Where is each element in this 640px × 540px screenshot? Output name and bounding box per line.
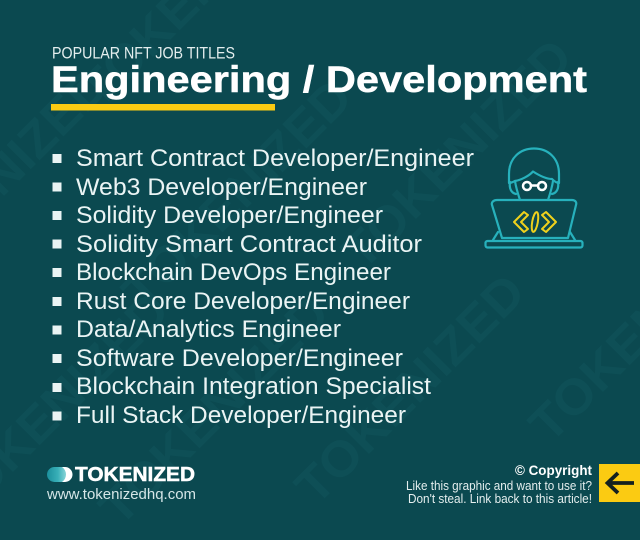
job titles list: Blockchain Integration Specialist <box>76 373 431 400</box>
laptop base <box>486 241 582 248</box>
laptop feet <box>493 232 575 240</box>
laptop <box>492 200 576 238</box>
background watermark pattern: TOKENIZED <box>111 68 363 320</box>
logo wordmark: TOKENIZED <box>75 463 195 486</box>
copyright note <box>406 463 592 506</box>
eyebrow heading: POPULAR NFT JOB TITLES <box>52 44 235 62</box>
bullets <box>52 154 62 420</box>
copyright note: © Copyright <box>515 463 592 478</box>
job titles list: Blockchain DevOps Engineer <box>76 259 391 286</box>
background watermark pattern: TOKENIZED <box>88 284 340 536</box>
face <box>515 181 553 200</box>
main title: Engineering / Development <box>51 58 588 100</box>
icon: developer at laptop <box>486 148 582 248</box>
title underline <box>51 104 275 110</box>
job titles list: Data/Analytics Engineer <box>76 316 341 343</box>
job titles list: Software Developer/Engineer <box>76 345 403 372</box>
ears <box>510 182 558 194</box>
code symbol <box>514 212 556 232</box>
job titles list: Smart Contract Developer/Engineer <box>76 145 474 172</box>
job titles list: Web3 Developer/Engineer <box>76 174 367 201</box>
background watermark pattern: TOKENIZED <box>284 263 536 515</box>
job titles list: Solidity Developer/Engineer <box>76 202 383 229</box>
glasses <box>523 182 546 190</box>
icon: arrow <box>608 473 634 493</box>
website url: www.tokenizedhq.com <box>46 487 196 503</box>
job titles list: Full Stack Developer/Engineer <box>76 402 406 429</box>
background watermark pattern <box>508 155 560 232</box>
copyright note: Like this graphic and want to use it? <box>406 479 592 493</box>
logo mark <box>47 467 72 482</box>
job titles list: Rust Core Developer/Engineer <box>76 288 410 315</box>
job titles list <box>52 145 474 429</box>
copyright note: Don't steal. Link back to this article! <box>408 492 592 506</box>
back arrow button <box>599 464 640 502</box>
logo <box>46 463 196 503</box>
job titles list: Solidity Smart Contract Auditor <box>76 231 422 258</box>
background watermark pattern: TOKENIZED <box>331 28 583 280</box>
hair <box>509 148 559 183</box>
